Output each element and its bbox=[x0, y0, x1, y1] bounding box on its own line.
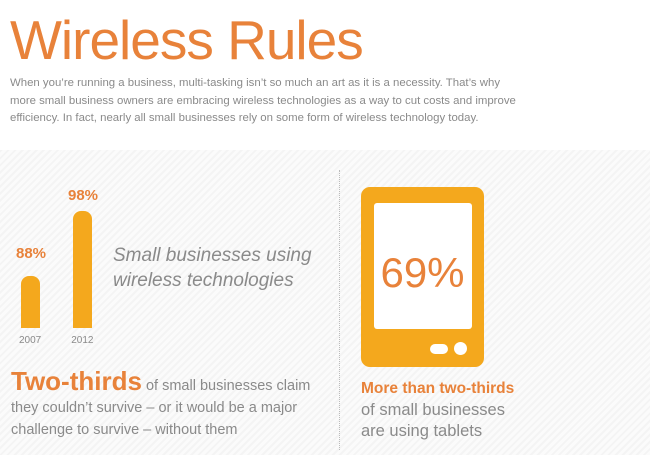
label 98%: 98% bbox=[68, 187, 98, 204]
chart caption: wireless technologies bbox=[113, 270, 294, 291]
stat 69%: 69% bbox=[380, 249, 465, 296]
two-thirds statement: challenge to survive – without them bbox=[11, 422, 238, 438]
two-thirds statement: Two-thirds of small businesses claim bbox=[11, 366, 310, 396]
bar chart bbox=[16, 187, 98, 346]
bar 2012 bbox=[73, 211, 92, 328]
tablets statement bbox=[361, 380, 514, 440]
intro paragraph: When you’re running a business, multi-tasking isn’t so much an art as it is a necessity. That’s why bbox=[10, 77, 500, 89]
bar 2007 bbox=[21, 276, 40, 328]
tablets statement: are using tablets bbox=[361, 422, 482, 440]
chart caption bbox=[113, 245, 312, 291]
two-thirds statement: they couldn’t survive – or it would be a major bbox=[11, 400, 297, 416]
intro paragraph: more small business owners are embracing wireless technologies as a way to cut costs and improve bbox=[10, 94, 516, 106]
tablets statement: More than two-thirds bbox=[361, 380, 514, 397]
chart caption: Small businesses using bbox=[113, 245, 312, 266]
title: Wireless Rules bbox=[10, 9, 363, 71]
intro paragraph bbox=[10, 77, 516, 124]
tablets statement: of small businesses bbox=[361, 400, 505, 418]
icon: tablet with 69% bbox=[361, 187, 484, 367]
intro paragraph: efficiency. In fact, nearly all small businesses rely on some form of wireless technology today. bbox=[10, 112, 478, 124]
year labels: 2007 2012 bbox=[19, 335, 94, 346]
label 88%: 88% bbox=[16, 245, 46, 262]
two-thirds statement bbox=[11, 366, 310, 438]
